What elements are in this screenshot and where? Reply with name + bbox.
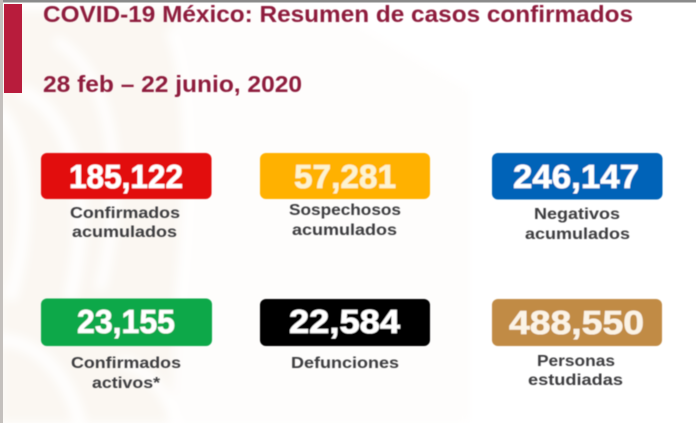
panel: confirmados activos: 23,155 bbox=[77, 303, 175, 340]
panel: confirmados activos: Confirmados bbox=[71, 355, 181, 372]
panel: sospechosos acumulados bbox=[260, 153, 430, 239]
panel: sospechosos acumulados: 57,281 bbox=[294, 158, 396, 195]
background: faint emblem watermark bbox=[0, 10, 470, 423]
panel: personas estudiadas: 488,550 bbox=[509, 304, 644, 341]
panel: personas estudiadas bbox=[492, 299, 662, 389]
red accent bar bbox=[4, 4, 22, 93]
panel: confirmados activos: activos* bbox=[92, 375, 161, 392]
panel: confirmados acumulados bbox=[41, 153, 212, 241]
panel: defunciones: 22,584 bbox=[289, 303, 401, 340]
panel: defunciones: Defunciones bbox=[291, 355, 399, 372]
date range: 28 feb – 22 junio, 2020 bbox=[43, 71, 302, 97]
panel: negativos acumulados: 246,147 bbox=[513, 158, 639, 195]
panel: confirmados acumulados: 185,122 bbox=[69, 158, 183, 195]
panel: confirmados acumulados: Confirmados bbox=[70, 205, 180, 222]
panel: sospechosos acumulados: acumulados bbox=[292, 222, 397, 239]
panel: personas estudiadas: Personas bbox=[537, 353, 615, 370]
panel: personas estudiadas: estudiadas bbox=[528, 372, 623, 389]
panel: confirmados activos bbox=[41, 298, 212, 392]
panel: sospechosos acumulados: Sospechosos bbox=[289, 202, 401, 219]
title: COVID-19 México: Resumen de casos confirmados bbox=[43, 1, 633, 27]
panel: negativos acumulados bbox=[492, 153, 662, 243]
panel: confirmados acumulados: acumulados bbox=[72, 224, 177, 241]
panel: negativos acumulados: Negativos bbox=[534, 206, 620, 223]
panel: negativos acumulados: acumulados bbox=[525, 226, 630, 243]
panel: defunciones bbox=[260, 299, 430, 372]
